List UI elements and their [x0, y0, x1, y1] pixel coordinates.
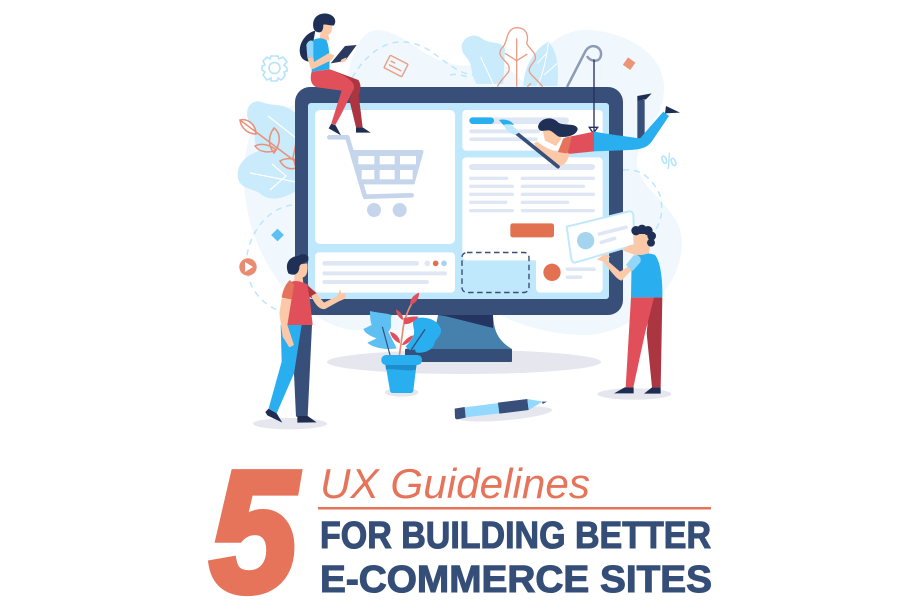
monitor frame: [295, 87, 623, 315]
title block: [210, 436, 712, 613]
figure: seated woman with tablet: [300, 14, 371, 135]
divider rule: [318, 507, 711, 510]
decorative dashed arcs: [246, 42, 662, 311]
left foliage: [238, 101, 300, 199]
top right foliage: [462, 28, 558, 87]
icon: percent: %: [658, 148, 680, 175]
panel: bottom right card: [536, 252, 603, 293]
monitor: [295, 87, 623, 362]
figure: hanging woman with paintbrush: [499, 59, 680, 167]
heading line 2: E-COMMERCE SITES: [320, 559, 712, 601]
background blobs: [244, 30, 682, 335]
figure: man pointing: [253, 254, 346, 429]
panel: top right card: [462, 110, 603, 151]
monitor stand: [405, 315, 512, 362]
button: [510, 223, 554, 237]
icon: shopping cart: [329, 137, 423, 217]
heading: UX Guidelines: UX Guidelines: [320, 460, 590, 507]
icon: blue diamond: [271, 229, 284, 241]
heading line 1: FOR BUILDING BETTER: [320, 515, 711, 557]
panel: cart: [315, 110, 455, 244]
figure: man holding card: [567, 211, 671, 400]
paper clip hook: [567, 46, 601, 87]
panel: product details: [462, 157, 603, 260]
icon: credit card: [384, 55, 408, 77]
panel: bottom left card: [315, 252, 455, 293]
icon: gear: [262, 56, 287, 81]
potted plant: [363, 293, 441, 397]
icon: play button: [239, 258, 257, 276]
monitor shadow: [327, 350, 601, 374]
pen: [455, 399, 553, 424]
monitor screen: [308, 103, 609, 299]
icon: orange diamond: [623, 57, 635, 70]
dashed placeholder: [462, 252, 529, 292]
